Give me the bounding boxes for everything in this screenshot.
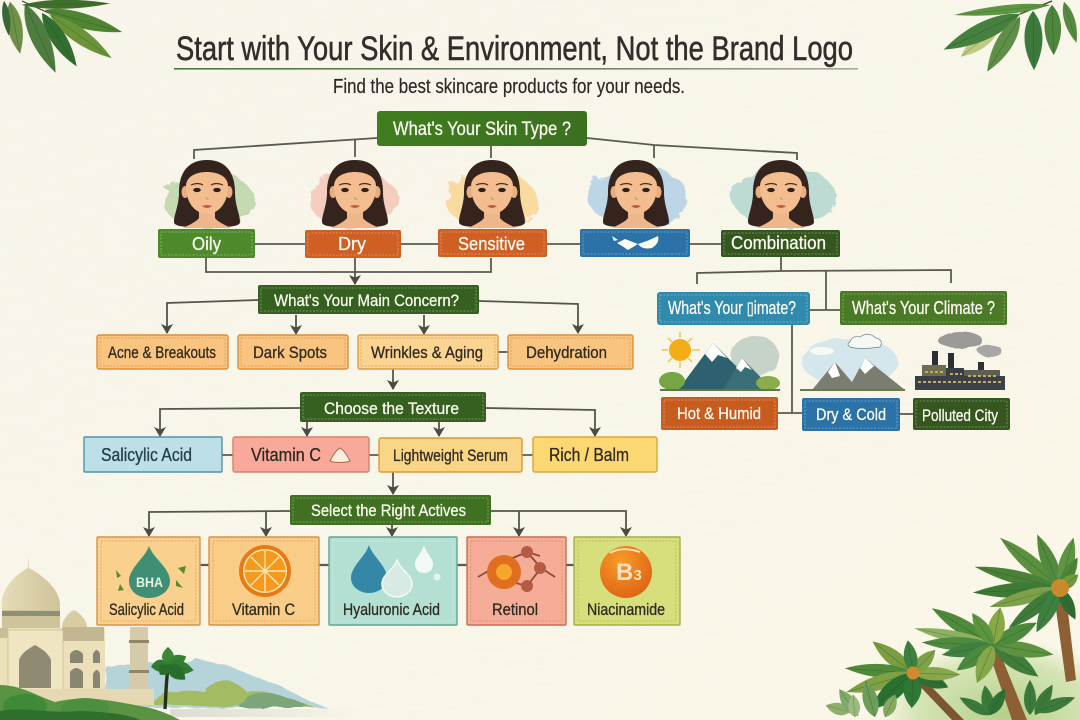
heading box: Choose the Texture xyxy=(300,392,486,422)
illustration: polluted city xyxy=(915,331,1005,390)
foliage: bottom right palms xyxy=(824,532,1080,720)
concern: Dehydration: Dehydration xyxy=(526,343,607,362)
foliage: top right corner xyxy=(940,0,1080,76)
concern: Dark Spots: Dark Spots xyxy=(253,343,327,362)
connectors from concern box xyxy=(167,300,578,389)
label: Combination xyxy=(721,230,840,257)
portrait: dry skin xyxy=(309,160,399,228)
icon: BHA drop: BHA xyxy=(136,574,163,590)
label: Sensitive: Sensitive xyxy=(458,234,525,254)
label: normal skin with garbled white glyph shapes xyxy=(580,229,690,257)
landmark: domed monument, palm and bushes, bottom left xyxy=(0,555,360,720)
heading box: Main Concern xyxy=(258,285,479,314)
label: Combination: Combination xyxy=(731,233,826,253)
active card: Retinol xyxy=(467,537,566,625)
heading box: climate (green) xyxy=(840,291,1007,325)
texture: Lightweight Serum xyxy=(379,438,522,472)
illustration: hot and humid xyxy=(659,332,780,391)
icon: orange slice xyxy=(239,545,291,597)
label: Dry & Cold: Dry & Cold xyxy=(816,405,886,424)
label: Sensitive xyxy=(438,229,547,257)
heading box: Choose the Texture: Choose the Texture xyxy=(324,399,459,418)
label: Hot & Humid: Hot & Humid xyxy=(677,404,761,423)
label: Dry xyxy=(305,230,401,258)
active card: Vitamin C xyxy=(209,537,319,625)
texture: Vitamin C with bun icon xyxy=(233,437,369,472)
portrait: sensitive skin xyxy=(445,160,537,228)
heading box: Select the Right Actives xyxy=(290,495,491,525)
connectors from skin type to faces xyxy=(194,138,797,160)
connectors between skin type labels xyxy=(206,244,721,284)
label: Oily xyxy=(158,229,255,258)
label: Hot & Humid xyxy=(661,397,778,430)
active card: Retinol: Retinol xyxy=(492,600,538,619)
heading box: What's Your Skin Type xyxy=(377,111,587,146)
label: Oily: Oily xyxy=(192,234,221,254)
subtitle: Find the best skincare products for your needs. xyxy=(333,76,685,98)
portrait: combination skin xyxy=(732,160,836,228)
texture: Rich / Balm xyxy=(533,437,657,472)
texture: Salicylic Acid: Salicylic Acid xyxy=(101,445,192,465)
title: Start with Your Skin & Environment, Not the Brand Logo xyxy=(176,30,853,68)
concern: Wrinkles & Aging: Wrinkles & Aging xyxy=(371,343,483,362)
connectors for climate branch xyxy=(697,257,951,414)
icon: water droplets xyxy=(351,545,440,597)
label: Polluted City: Polluted City xyxy=(922,406,998,425)
label: Dry & Cold xyxy=(802,398,900,431)
heading box: Select the Right Actives: Select the Right Actives xyxy=(311,501,466,520)
icon: retinol molecule xyxy=(478,546,555,592)
connectors from texture box xyxy=(160,408,595,494)
portrait: oily skin xyxy=(162,160,254,228)
illustration: dry and cold xyxy=(800,334,905,391)
active card: Hyaluronic Acid xyxy=(329,537,457,625)
heading box: climate (blue) xyxy=(657,292,810,325)
active card: Hyaluronic Acid: Hyaluronic Acid xyxy=(343,600,440,619)
heading box: Main Concern: What's Your Main Concern? xyxy=(274,291,459,310)
title underline xyxy=(174,68,858,70)
connectors from actives box xyxy=(149,511,626,565)
active card: Niacinamide xyxy=(574,537,680,625)
concern: Acne & Breakouts xyxy=(97,335,228,369)
concern: Acne & Breakouts: Acne & Breakouts xyxy=(108,343,216,362)
active card: Niacinamide: Niacinamide xyxy=(587,600,665,619)
concern: Wrinkles & Aging xyxy=(358,335,498,369)
texture: Vitamin C with bun icon: Vitamin C xyxy=(251,445,321,465)
texture: Salicylic Acid xyxy=(84,437,222,472)
active card: Salicylic Acid: Salicylic Acid xyxy=(109,600,184,619)
heading box: What's Your Skin Type: What's Your Skin Type ? xyxy=(393,119,571,140)
portrait: normal skin xyxy=(588,160,688,228)
concern: Dehydration xyxy=(508,335,633,369)
icon: B3 capsule: B3 xyxy=(616,559,642,586)
label: Polluted City xyxy=(913,398,1010,430)
heading box: climate (green): What's Your Climate ? xyxy=(852,298,995,318)
active card: Salicylic Acid xyxy=(97,537,200,625)
heading box: climate (blue): What's Your ▯imate? xyxy=(668,298,796,318)
texture: Rich / Balm: Rich / Balm xyxy=(549,445,629,465)
concern: Dark Spots xyxy=(238,335,348,369)
texture: Lightweight Serum: Lightweight Serum xyxy=(393,446,508,465)
foliage: top left corner xyxy=(0,0,124,76)
label: Dry: Dry xyxy=(338,234,366,254)
active card: Vitamin C: Vitamin C xyxy=(232,600,295,619)
